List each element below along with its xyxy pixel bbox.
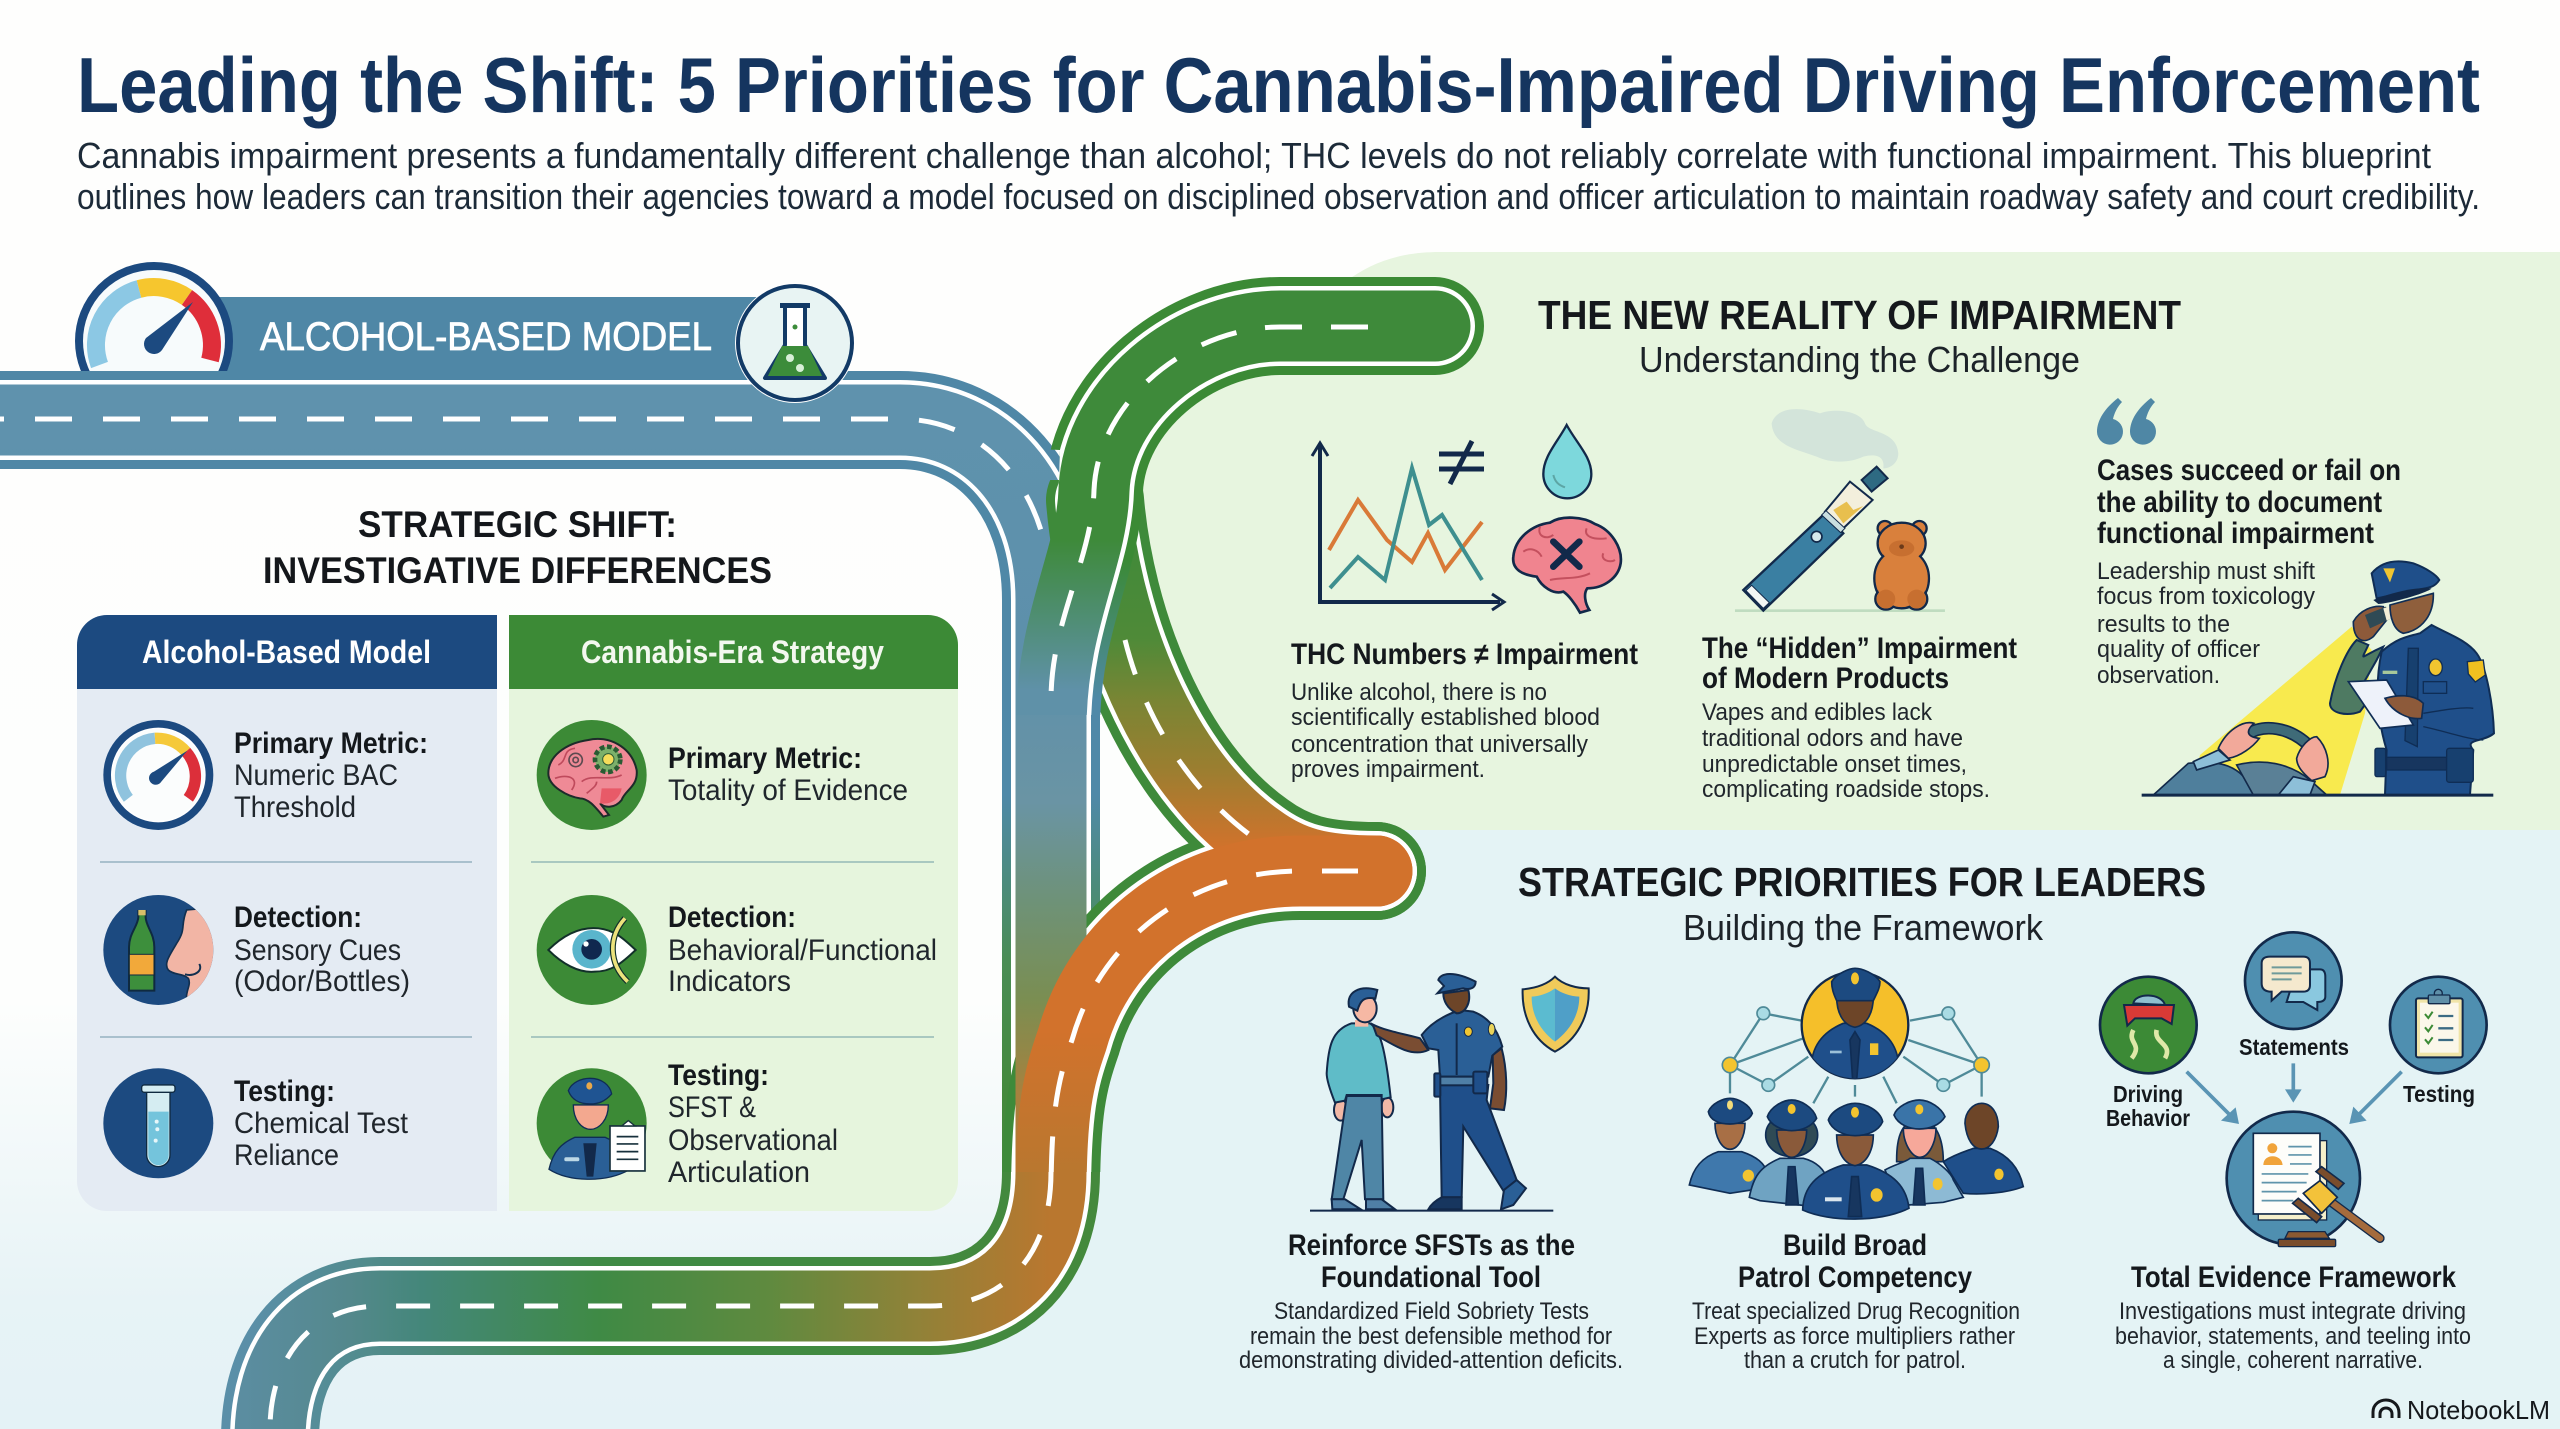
text: testing: Articulation: [668, 1156, 810, 1189]
icon: flask: [735, 283, 855, 403]
icon: brain with gears: [537, 720, 647, 830]
text: hidden impairment: of Modern Products: [1702, 662, 1949, 695]
text: testing: Reliance: [234, 1139, 339, 1172]
text: build broad patrol competency: [1692, 1229, 2020, 1374]
text: testing: [234, 1075, 409, 1172]
quote text: Leadership must shift: [2097, 558, 2315, 585]
text: hidden impairment: [1702, 632, 2017, 803]
text: detection: Detection:: [234, 901, 362, 934]
text: hidden impairment: complicating roadside stops.: [1702, 776, 1990, 803]
text: testing: [668, 1059, 838, 1189]
text: reinforce sfsts: [1239, 1229, 1623, 1374]
text: testing: Testing:: [234, 1075, 335, 1108]
text: testing: SFST &: [668, 1091, 756, 1124]
intro text: [77, 135, 2480, 217]
banner: alcohol-based model: [79, 266, 770, 416]
text: total evidence framework: Investigations must integrate driving: [2119, 1298, 2466, 1325]
panel: new reality background: [1094, 252, 2560, 871]
icon: officer observing driver with flashlight: [2142, 561, 2494, 797]
road: alcohol-based main route: [0, 419, 1051, 1429]
text: primary metric: Totality of Evidence: [668, 774, 908, 807]
label: statements: Statements: [2239, 1034, 2349, 1060]
text: build broad patrol competency: Patrol Competency: [1738, 1261, 1972, 1294]
label: testing: Testing: [2403, 1081, 2475, 1107]
icon: patrol officers network: [1689, 968, 2023, 1219]
quote text: quality of officer: [2097, 636, 2260, 663]
label: driving behavior: [2106, 1081, 2190, 1131]
text: reinforce sfsts: Foundational Tool: [1321, 1261, 1541, 1294]
text: build broad patrol competency: Build Broad: [1783, 1229, 1927, 1262]
notebooklm logo and wordmark: NotebookLM: [2407, 1395, 2550, 1425]
text: reinforce sfsts: Reinforce SFSTs as the: [1288, 1229, 1575, 1262]
text: total evidence framework: a single, coherent narrative.: [2163, 1347, 2423, 1374]
text: detection: Detection:: [668, 901, 796, 934]
label: driving behavior: Driving: [2113, 1081, 2183, 1107]
text: hidden impairment: Vapes and edibles lack: [1702, 699, 1933, 726]
quote text: observation.: [2097, 662, 2220, 689]
text: hidden impairment: unpredictable onset times,: [1702, 751, 1967, 778]
text: thc numbers: Unlike alcohol, there is no: [1291, 679, 1547, 706]
icon: officer reassuring civilian and shield: [1310, 974, 1589, 1212]
text: detection: Behavioral/Functional: [668, 934, 937, 967]
column header: Alcohol-Based Model: [142, 634, 431, 670]
icon: thc chart versus impairment: [1312, 425, 1621, 613]
road: orange and olive merging branches: [1051, 500, 1377, 1200]
text: detection: (Odor/Bottles): [234, 965, 410, 998]
icon: statements: [2245, 932, 2342, 1029]
icon: vape and gummy bear: [1735, 409, 1945, 612]
heading: strategic priorities: STRATEGIC PRIORITIES FOR LEADERS: [1518, 859, 2206, 905]
quote text: results to the: [2097, 611, 2230, 638]
text: thc numbers: concentration that universally: [1291, 731, 1588, 758]
intro text: Cannabis impairment presents a fundamentally different challenge than alcohol; THC levels do not reliably correlate with functional impairment. This blueprint: [77, 135, 2431, 176]
text: primary metric: Primary Metric:: [234, 727, 428, 760]
icon: evidence file and gavel: [2227, 1112, 2380, 1247]
icon: testing clipboard: [2390, 977, 2487, 1073]
text: total evidence framework: behavior, statements, and teeling into: [2115, 1323, 2471, 1350]
icon: officer with clipboard: [537, 1068, 647, 1179]
heading: the new reality of impairment: Understanding the Challenge: [1639, 339, 2080, 380]
quote text: Cases succeed or fail on: [2097, 454, 2401, 487]
text: total evidence framework: [2115, 1261, 2471, 1374]
heading: strategic priorities: [1518, 859, 2206, 948]
arrows into total evidence: [2187, 1063, 2402, 1124]
text: primary metric: Numeric BAC: [234, 759, 398, 792]
heading: strategic priorities: Building the Framework: [1683, 907, 2044, 948]
heading: strategic shift: STRATEGIC SHIFT:: [358, 504, 677, 545]
label: driving behavior: Behavior: [2106, 1105, 2190, 1131]
panel: alcohol-based model column: [77, 615, 497, 1211]
text: primary metric: Threshold: [234, 791, 356, 824]
text: detection: Indicators: [668, 965, 791, 998]
quote text: the ability to document: [2097, 486, 2382, 519]
text: detection: [668, 901, 937, 998]
banner label: ALCOHOL-BASED MODEL: [260, 315, 712, 359]
heading: strategic shift: INVESTIGATIVE DIFFERENCES: [263, 550, 772, 591]
text: thc numbers: THC Numbers ≠ Impairment: [1291, 638, 1638, 671]
quote text: focus from toxicology: [2097, 583, 2315, 610]
text: primary metric: Primary Metric:: [668, 742, 862, 775]
text: testing: Testing:: [668, 1059, 769, 1092]
heading: strategic shift: [263, 504, 772, 591]
text: reinforce sfsts: Standardized Field Sobriety Tests: [1274, 1298, 1589, 1325]
icon: test tube: [103, 1068, 213, 1178]
text: thc numbers: proves impairment.: [1291, 756, 1485, 783]
text: detection: Sensory Cues: [234, 934, 401, 967]
road: green cannabis-era route: [1051, 326, 1435, 730]
text: build broad patrol competency: Treat specialized Drug Recognition: [1692, 1298, 2020, 1325]
icon: bottle and nose: [103, 895, 223, 1005]
icon: eye: [537, 895, 647, 1005]
panel: strategic priorities background: [930, 830, 2560, 1429]
panel: cannabis-era strategy column: [509, 615, 958, 1211]
text: primary metric: [668, 742, 908, 807]
text: total evidence framework: Total Evidence Framework: [2131, 1261, 2456, 1294]
icon: gauge: [103, 720, 213, 830]
text: primary metric: [234, 727, 428, 824]
text: thc numbers: [1291, 638, 1638, 783]
icon: driving behavior: [2100, 977, 2197, 1073]
text: testing: Observational: [668, 1124, 838, 1157]
icon: quotation marks: [2097, 398, 2156, 445]
heading: the new reality of impairment: [1538, 292, 2181, 380]
text: thc numbers: scientifically established blood: [1291, 704, 1600, 731]
text: build broad patrol competency: than a crutch for patrol.: [1744, 1347, 1966, 1374]
text: hidden impairment: The “Hidden” Impairment: [1702, 632, 2017, 665]
text: detection: [234, 901, 410, 998]
heading: the new reality of impairment: THE NEW REALITY OF IMPAIRMENT: [1538, 292, 2181, 338]
quote text: [2097, 454, 2401, 689]
quote text: functional impairment: [2097, 517, 2374, 550]
text: reinforce sfsts: demonstrating divided-attention deficits.: [1239, 1347, 1623, 1374]
text: reinforce sfsts: remain the best defensible method for: [1250, 1323, 1612, 1350]
text: hidden impairment: traditional odors and have: [1702, 725, 1963, 752]
column header: Cannabis-Era Strategy: [581, 634, 884, 670]
text: build broad patrol competency: Experts as force multipliers rather: [1694, 1323, 2015, 1350]
icon: speedometer gauge: [79, 266, 229, 416]
text: testing: Chemical Test: [234, 1107, 409, 1140]
